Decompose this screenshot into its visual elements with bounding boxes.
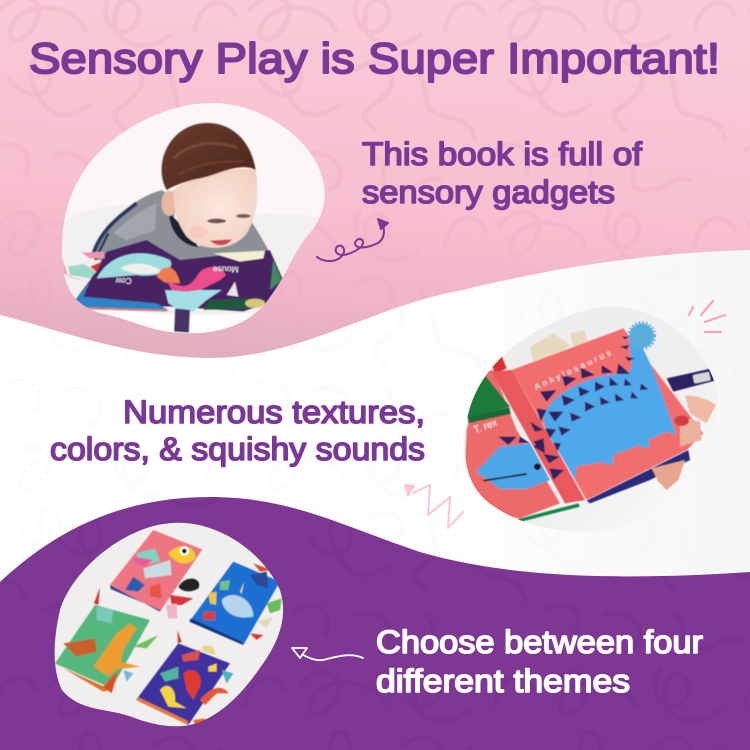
tags [530,333,570,362]
hand [685,396,716,423]
photo: dinosaur cloth book page: T. rex [472,417,499,436]
arrow: curly purple [317,219,388,261]
text: four themes: different themes [376,663,630,699]
text: four themes [376,624,703,699]
ocean book [189,562,280,645]
photo: dinosaur cloth book page [464,307,716,531]
face [173,169,257,248]
shirt [92,190,270,263]
photo: baby reading a cloth book: Cow [115,276,132,285]
text: textures [50,394,425,467]
text: book gadgets: sensory gadgets [362,174,615,210]
jungle book [55,605,150,688]
burst lines [689,301,725,332]
photo: four themed cloth books [50,518,290,733]
arrow: white pointing to themes [292,648,363,660]
photo background floor [62,204,319,314]
text: four themes: Choose between four [376,624,703,660]
background pattern: purple squiggles [0,497,750,750]
background: white middle band [0,250,750,620]
text: textures: Numerous textures, [123,394,425,430]
spine and right page [492,370,585,503]
page text: Ankylosaurus [533,348,612,392]
ear [161,191,177,216]
big dino [543,338,677,480]
cloth book [75,240,283,312]
text: book gadgets [362,136,642,210]
photo: baby reading a cloth book [55,100,335,340]
hair [162,123,256,190]
photo: baby reading a cloth book: Mouse [212,265,239,275]
dinosaur book [136,643,230,725]
left page [465,370,560,518]
arrow: pink zigzag [405,485,463,528]
text: textures: colors, & squishy sounds [50,431,425,467]
title: Sensory Play is Super Important! [29,35,720,83]
background pattern: faint white band squiggles [0,250,750,620]
farm book [110,530,202,612]
text: book gadgets: This book is full of [362,136,642,172]
background: purple bottom section [0,497,750,750]
pompom [630,324,654,348]
small dino [476,443,550,489]
strap [667,368,715,392]
background pattern: pink squiggles [0,0,750,362]
background: pink top section [0,0,750,362]
